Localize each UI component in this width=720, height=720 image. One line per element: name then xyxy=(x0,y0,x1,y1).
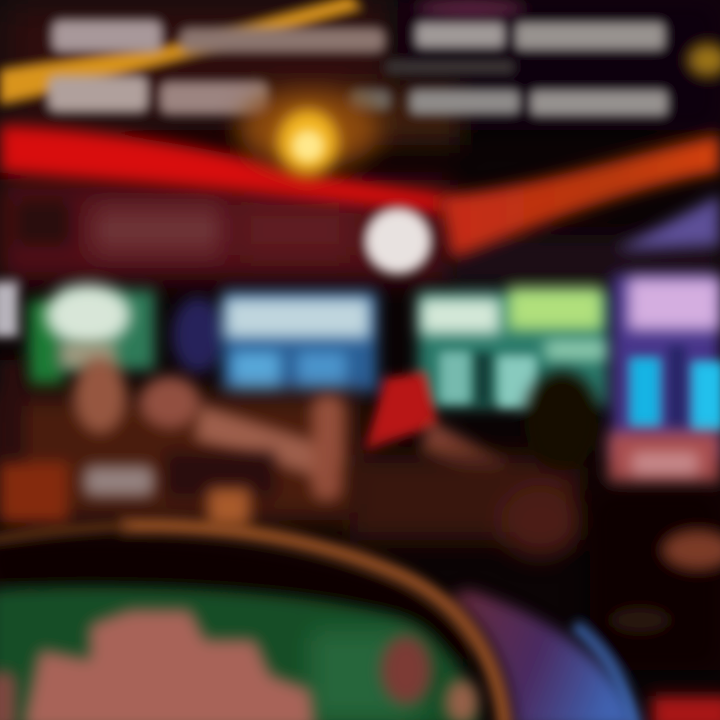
screen green xyxy=(28,285,155,385)
outer blue rim xyxy=(450,590,638,720)
yellow streak xyxy=(0,0,362,104)
blurred headline right xyxy=(385,22,668,116)
panel: hands on table xyxy=(0,610,478,720)
screen blue xyxy=(222,292,377,392)
panel: slot machine screens xyxy=(0,275,720,484)
panel: right lower shadows xyxy=(590,490,720,720)
glowing light xyxy=(240,90,380,174)
wooden rim xyxy=(120,526,505,720)
dark figure xyxy=(524,370,600,470)
screen green teal xyxy=(418,288,608,408)
top purple accent xyxy=(415,0,525,18)
screen pink cyan xyxy=(608,275,720,484)
dark blue gap xyxy=(172,297,224,373)
red figure xyxy=(365,372,438,450)
orange-red wedge xyxy=(440,135,720,258)
green felt xyxy=(0,587,480,720)
panel: roulette table xyxy=(0,526,638,720)
panel: dark red wall xyxy=(0,180,720,285)
dark shadow band xyxy=(0,543,470,665)
panel: top signage xyxy=(0,0,720,145)
purple ceiling accent xyxy=(615,195,720,250)
screen far left xyxy=(0,282,18,337)
panel: crowd of people xyxy=(0,357,600,556)
yellow side mark xyxy=(688,44,720,76)
blurred headline left xyxy=(48,20,390,114)
red ribbon xyxy=(0,125,445,212)
white ball light xyxy=(366,209,430,273)
